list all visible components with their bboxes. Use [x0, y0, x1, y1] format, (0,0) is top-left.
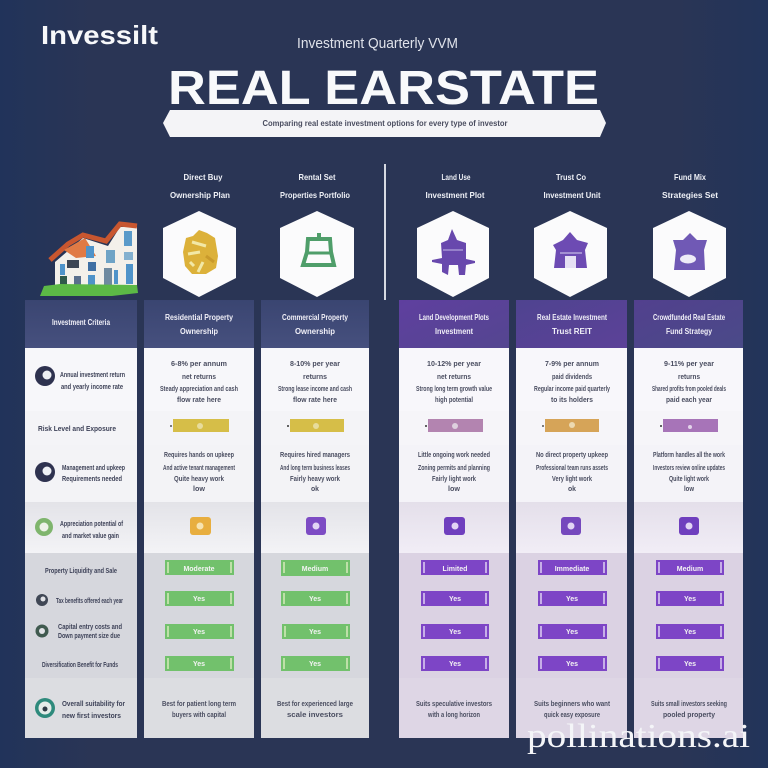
column titles: Ownership Plan: [170, 190, 230, 200]
panel: feature labels: Management and upkeep: [62, 463, 125, 472]
title: REAL EARSTATE: [168, 62, 599, 115]
panel: direct ownership column: 6-8% per annum: [171, 359, 227, 368]
rating bar labels: Yes: [566, 596, 578, 603]
column titles: Investment Unit: [544, 190, 601, 200]
panel: land investment column: net returns: [437, 372, 471, 381]
panel: direct ownership column: flow rate here: [177, 395, 221, 404]
panel: fund strategies column: low: [684, 484, 694, 493]
panel: trust investment column: [516, 300, 627, 738]
column titles: Rental Set: [298, 172, 336, 182]
panel: feature labels: Property Liquidity and Sale: [45, 566, 117, 575]
panel: rental properties column: Requires hired managers: [280, 450, 350, 459]
icon hexagon: violet house: [653, 211, 726, 297]
panel: feature labels: Requirements needed: [62, 474, 122, 483]
panel: land investment column: [399, 300, 509, 738]
panel: fund strategies column: Suits small investors seeking: [651, 699, 727, 708]
panel: feature labels: Investment Criteria: [52, 318, 110, 327]
green rating bars: [165, 560, 350, 671]
panel: feature labels: Tax benefits offered each year: [56, 596, 123, 605]
panel: land investment column: Suits speculative investors: [416, 699, 492, 708]
rating bar labels: Limited: [443, 566, 467, 573]
risk level bars: [170, 419, 718, 432]
rating bar labels: Yes: [566, 661, 578, 668]
panel: fund strategies column: Quite light work: [669, 474, 710, 483]
column titles: Investment Plot: [426, 190, 485, 200]
panel: fund strategies column: Fund Strategy: [666, 327, 712, 336]
panel: feature labels: Risk Level and Exposure: [38, 424, 116, 433]
panel: fund strategies column: [634, 300, 743, 738]
panel: fund strategies column: 9-11% per year: [664, 359, 714, 368]
rating bar labels: Immediate: [555, 566, 589, 573]
panel: feature labels: Annual investment return: [60, 370, 125, 379]
panel: trust investment column: Professional team runs assets: [536, 463, 608, 472]
panel: feature labels: Overall suitability for: [62, 699, 125, 708]
panel: direct ownership column: [144, 300, 254, 738]
icon: house illustration: [40, 224, 138, 296]
rating bar labels: [183, 566, 703, 668]
panel: trust investment column: Trust REIT: [552, 327, 592, 336]
center divider: [384, 164, 386, 300]
panel: feature labels: Diversification Benefit for Funds: [42, 660, 118, 669]
panel: direct ownership column: Steady appreciation and cash: [160, 384, 238, 393]
rating bar labels: Medium: [677, 566, 703, 573]
column titles: Properties Portfolio: [280, 190, 350, 200]
panel: feature labels: and yearly income rate: [61, 382, 123, 391]
panel: rental properties column: And long term business leases: [280, 463, 350, 472]
panel: fund strategies column: Crowdfunded Real Estate: [653, 313, 725, 322]
panel: rental properties column: Strong lease income and cash: [278, 384, 352, 393]
panel: fund strategies column: Investors review online updates: [653, 463, 725, 472]
column titles: Land Use: [442, 172, 471, 182]
panel: fund strategies column: Shared profits from pooled deals: [652, 384, 726, 393]
logo: Invessilt: [41, 20, 158, 50]
panel: land investment column: Strong long term growth value: [416, 384, 492, 393]
rating bar labels: Yes: [309, 629, 321, 636]
column titles: Trust Co: [556, 172, 586, 182]
panel: direct ownership column: Ownership: [180, 327, 218, 336]
top tagline: Investment Quarterly VVM: [297, 35, 458, 52]
panel: trust investment column: Very light work: [552, 474, 593, 483]
panel: fund strategies column: pooled property: [663, 710, 716, 719]
column titles: [170, 172, 718, 200]
panel: land investment column: Investment: [435, 327, 473, 336]
rating bar labels: Yes: [449, 596, 461, 603]
panel: fund strategies column: returns: [678, 372, 700, 381]
panel: rental properties column: Fairly heavy work: [290, 474, 341, 483]
panel: feature labels: Capital entry costs and: [58, 622, 122, 631]
panel: rental properties column: ok: [311, 484, 320, 493]
panel: rental properties column: returns: [303, 372, 327, 381]
rating bar labels: Yes: [684, 661, 696, 668]
panel: rental properties column: Commercial Property: [282, 313, 348, 322]
panel: trust investment column: 7-9% per annum: [545, 359, 599, 368]
panel: land investment column: Little ongoing work needed: [418, 450, 490, 459]
column titles: Strategies Set: [662, 190, 718, 200]
panel: trust investment column: Regular income paid quarterly: [534, 384, 611, 393]
column titles: Fund Mix: [674, 172, 706, 182]
panel: feature labels: and market value gain: [62, 531, 119, 540]
panel: land investment column: low: [448, 484, 460, 493]
rating bar labels: Yes: [309, 661, 321, 668]
panel: rental properties column: Best for experienced large: [277, 699, 353, 708]
panel: direct ownership column: buyers with capital: [172, 710, 226, 719]
panel: land investment column: Zoning permits and planning: [418, 463, 490, 472]
rating bar labels: Yes: [684, 629, 696, 636]
rating bar labels: Yes: [193, 661, 205, 668]
panel: rental properties column: scale investors: [287, 710, 343, 719]
rating bar labels: Yes: [193, 629, 205, 636]
rating badges: [190, 517, 699, 535]
panel: rental properties column: [261, 300, 369, 738]
panel: land investment column: Fairly light work: [432, 474, 477, 483]
rating bar labels: Moderate: [183, 566, 215, 573]
column titles: Direct Buy: [184, 172, 223, 182]
panel: direct ownership column: net returns: [182, 372, 216, 381]
rating bar labels: Yes: [566, 629, 578, 636]
panel: fund strategies column: paid each year: [666, 395, 712, 404]
rating bar labels: Yes: [684, 596, 696, 603]
panel: trust investment column: Suits beginners who want: [534, 699, 610, 708]
icon hexagon: purple house: [534, 211, 607, 297]
panel: trust investment column: to its holders: [551, 395, 593, 404]
panel: rental properties column: flow rate here: [293, 395, 337, 404]
panel: trust investment column: Real Estate Investment: [537, 313, 607, 322]
panel: land investment column: Land Development Plots: [419, 313, 489, 322]
panel: trust investment column: No direct property upkeep: [536, 450, 608, 459]
purple rating bars: [421, 560, 724, 671]
rating bar labels: Yes: [193, 596, 205, 603]
panel: direct ownership column: low: [193, 484, 205, 493]
panel: direct ownership column: And active tenant management: [163, 463, 235, 472]
panel: land investment column: high potential: [435, 395, 473, 404]
panel: trust investment column: quick easy exposure: [544, 710, 600, 719]
panel: rental properties column: 8-10% per year: [290, 359, 340, 368]
panel: trust investment column: ok: [568, 484, 577, 493]
panel: feature labels: [25, 300, 137, 738]
panel: direct ownership column: Requires hands on upkeep: [164, 450, 234, 459]
icon hexagon: gold building: [163, 211, 236, 297]
panel: trust investment column: paid dividends: [552, 372, 592, 381]
rating bar labels: Yes: [309, 596, 321, 603]
panel: direct ownership column: Residential Property: [165, 313, 233, 322]
watermark: pollinations.ai: [527, 718, 750, 755]
panel: direct ownership column: Quite heavy work: [174, 474, 225, 483]
panel: feature labels: new first investors: [62, 711, 121, 720]
panel: land investment column: 10-12% per year: [427, 359, 481, 368]
icon hexagon: green building: [280, 211, 354, 297]
rating bar labels: Medium: [302, 566, 328, 573]
rating bar labels: Yes: [449, 661, 461, 668]
subtitle banner: [163, 110, 606, 137]
panel: direct ownership column: Best for patient long term: [162, 699, 236, 708]
panel: rental properties column: Ownership: [295, 327, 335, 336]
subtitle banner: Comparing real estate investment options for every type of investor: [262, 119, 508, 128]
panel: fund strategies column: Platform handles all the work: [653, 450, 726, 459]
icon hexagon: purple star building: [417, 211, 489, 297]
rating bar labels: Yes: [449, 629, 461, 636]
panel: feature labels: Appreciation potential of: [60, 519, 123, 528]
panel: land investment column: with a long horizon: [427, 710, 480, 719]
panel: feature labels: Down payment size due: [58, 631, 120, 640]
